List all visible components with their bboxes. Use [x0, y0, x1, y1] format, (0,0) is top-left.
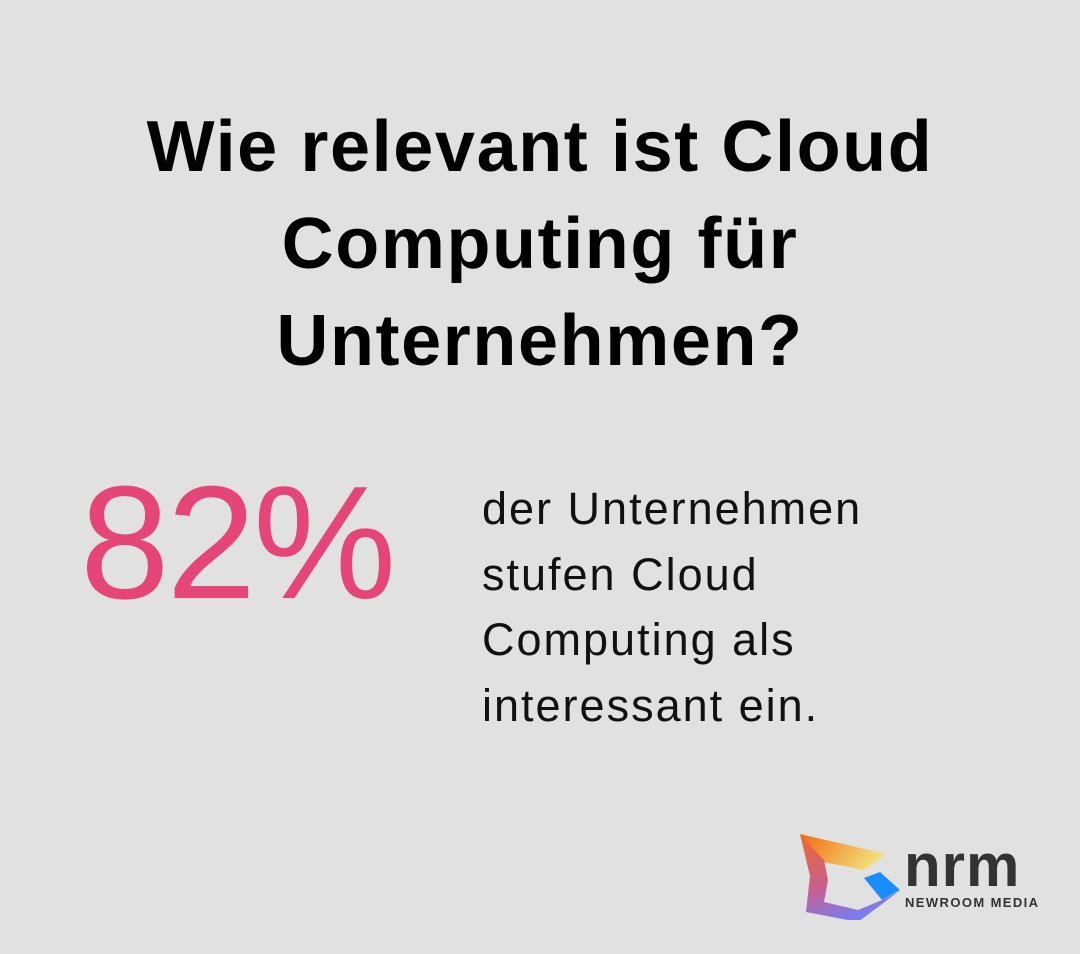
- description text: der Unternehmen: [482, 483, 862, 534]
- title: Wie relevant ist Cloud: [147, 107, 933, 187]
- logo: newroom media: [800, 832, 1039, 920]
- logo text: nrm: [904, 832, 1020, 899]
- icon: logo mark: [800, 834, 900, 922]
- description text: stufen Cloud: [482, 548, 759, 600]
- statistic: 82%: 82%: [80, 453, 393, 633]
- title: Unternehmen?: [276, 301, 804, 381]
- description text: [482, 483, 862, 730]
- description text: interessant ein.: [482, 680, 819, 730]
- logo text: NEWROOM MEDIA: [905, 895, 1039, 910]
- title: Computing für: [282, 204, 798, 284]
- title: [146, 107, 933, 381]
- description text: Computing als: [482, 614, 796, 665]
